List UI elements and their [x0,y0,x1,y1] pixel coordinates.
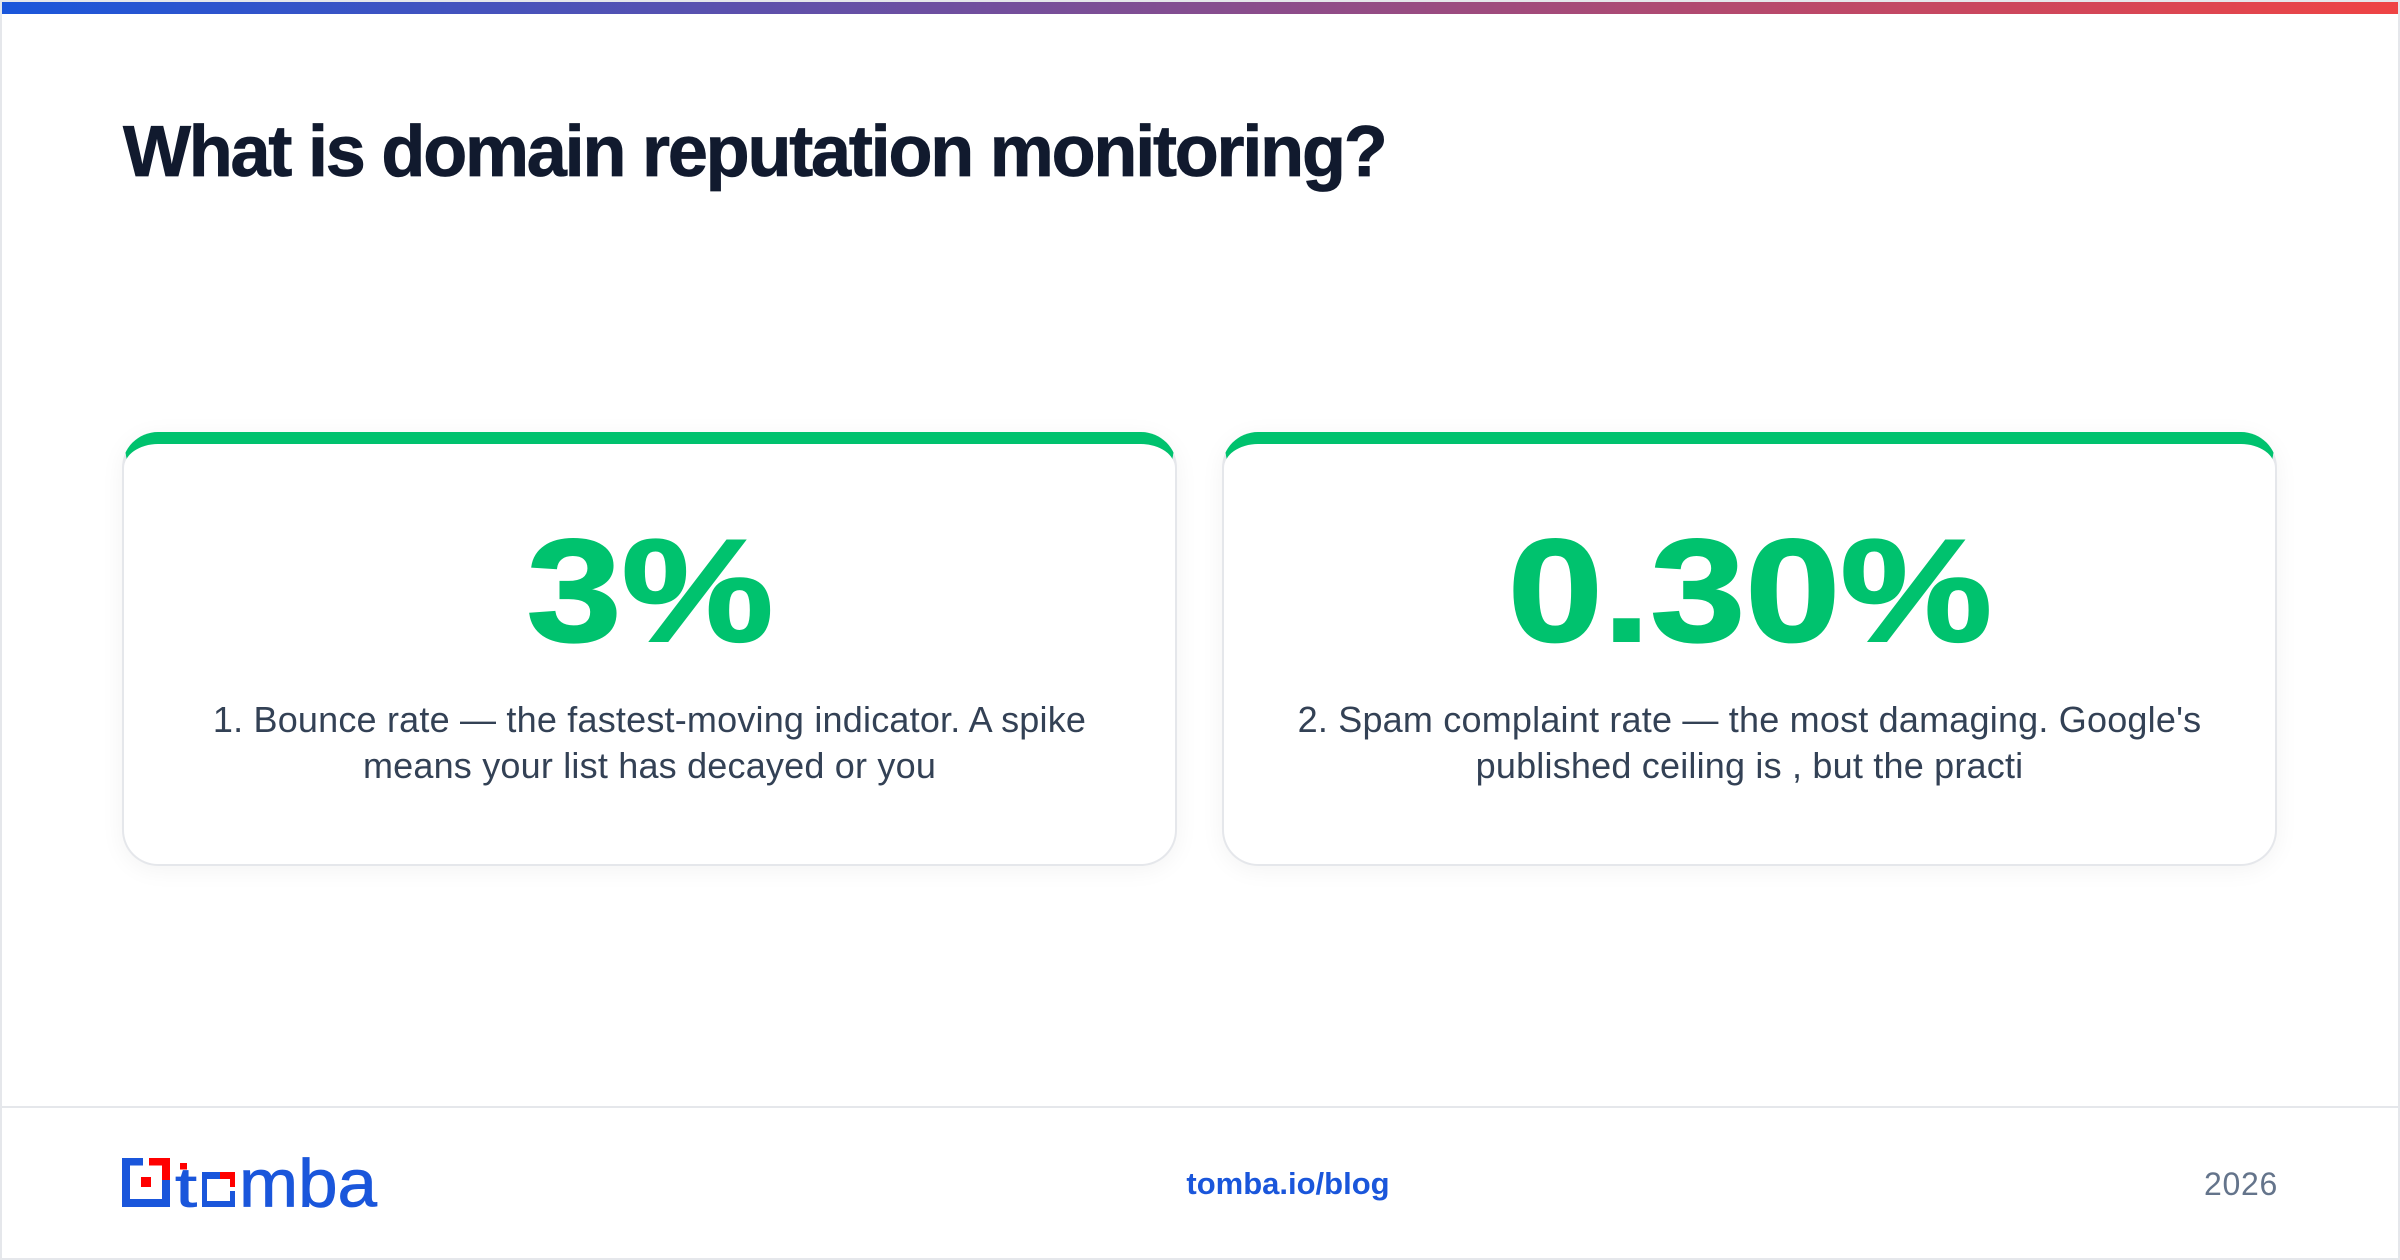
panel: bounce rate [122,432,1177,866]
top gradient bar [2,2,2398,14]
logo: tomba [122,1150,378,1216]
description: bounce rate: 1. Bounce rate — the fastest-moving indicator. A spike [213,699,1086,740]
wordmark [175,1146,377,1222]
footer year: 2026 [2204,1166,2278,1202]
title: What is domain reputation monitoring? [123,112,1386,192]
footer url: tomba.io/blog [1186,1166,1390,1201]
description: spam complaint rate: 2. Spam complaint rate — the most damaging. Google's [1298,699,2201,740]
description: bounce rate [213,699,1086,786]
icon: logo square [122,1158,170,1207]
panel: spam complaint rate [1222,432,2277,866]
description: bounce rate: means your list has decayed or you [363,745,936,786]
description: spam complaint rate: published ceiling is , but the practi [1476,745,2023,786]
stat: 0.30%: 0.30% [1507,509,1992,672]
description: spam complaint rate [1298,699,2201,786]
stat: 3%: 3% [526,509,773,672]
